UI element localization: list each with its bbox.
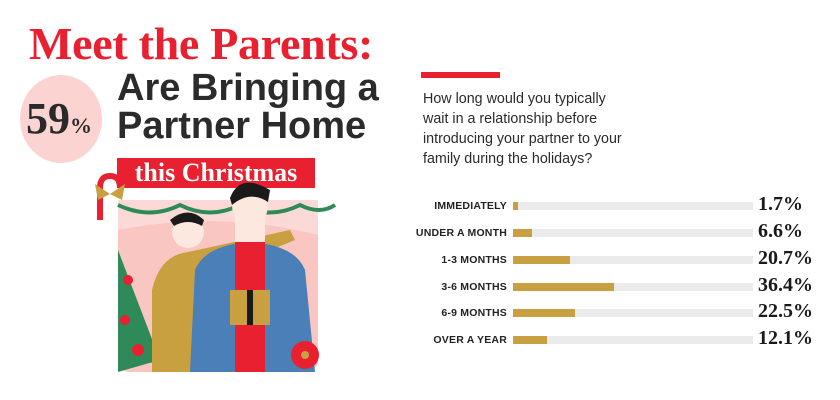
banner: this Christmas [135,158,297,187]
row: 3-6 months [441,274,813,296]
row: 1-3 months [441,247,813,269]
bar chart: 3-6 MONTHS [441,281,507,293]
row: under a month [416,220,803,242]
subtitle: Partner Home [117,105,366,147]
stat circle: 59% [26,94,92,143]
poinsettia [291,341,319,369]
row: 6-9 months [441,300,813,322]
woman [152,212,295,372]
question [423,91,622,167]
question: wait in a relationship before [423,111,597,127]
scene background [118,200,335,372]
subtitle [117,67,379,147]
accent bar [421,72,500,78]
tree [118,250,160,372]
row: over a year [433,327,813,349]
bar chart: UNDER A MONTH [416,227,507,239]
bar chart: 12.1% [758,327,813,349]
man [190,183,315,372]
bar chart: 6.6% [758,220,803,242]
bar chart: 36.4% [758,274,813,296]
bar chart: 22.5% [758,300,813,322]
bar chart: 1-3 MONTHS [441,254,507,266]
bar chart: 20.7% [758,247,813,269]
bar chart: 6-9 MONTHS [441,307,507,319]
bar chart: IMMEDIATELY [434,200,507,212]
illustration [95,173,336,372]
question: introducing your partner to your [423,131,622,147]
question: How long would you typically [423,91,606,107]
question: family during the holidays? [423,151,592,167]
stat circle [20,75,102,163]
row: immediately [434,193,803,215]
subtitle: Are Bringing a [117,67,379,109]
bar chart: OVER A YEAR [433,334,507,346]
candy cane [95,176,125,220]
bar chart: 1.7% [758,193,803,215]
title: Meet the Parents: [29,18,373,69]
